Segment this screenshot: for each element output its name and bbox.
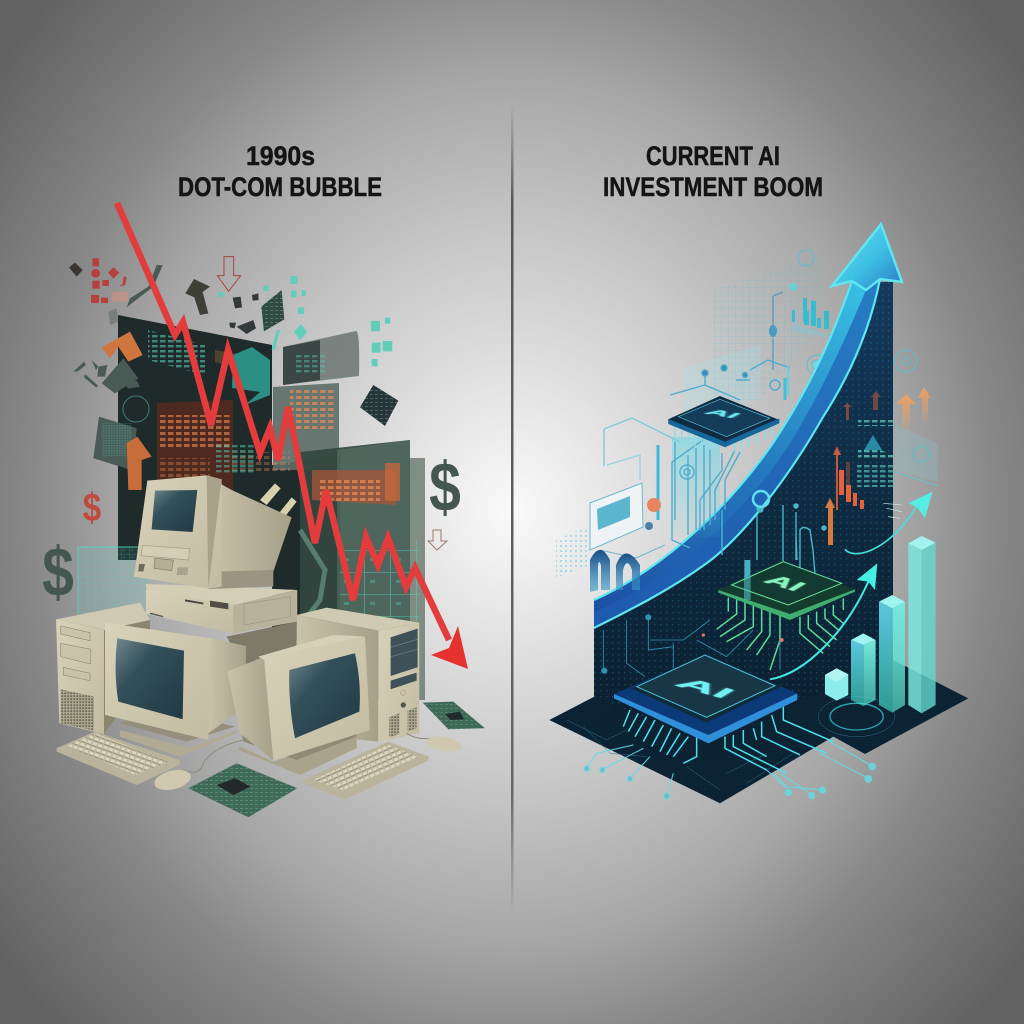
top: [678, 399, 770, 437]
pin extensions beyond floor: [584, 742, 876, 799]
grid panel lower-left: [556, 525, 590, 578]
chip: blue AI chip: [584, 615, 876, 799]
front left monitor: [105, 623, 246, 757]
floor: [549, 660, 968, 803]
pins: [675, 425, 772, 455]
icon: dollar sign green right: $: [429, 449, 461, 526]
orange bars in wall: [825, 391, 881, 545]
icon: small outline down arrow: [428, 530, 447, 550]
node circles: [798, 250, 917, 375]
green top: [732, 562, 842, 605]
icon: dollar sign red: $: [83, 485, 101, 530]
mouse left with cable: [152, 740, 243, 794]
orange up arrows in wall: [833, 446, 841, 510]
top monitor: [134, 475, 297, 589]
shaft: [594, 279, 880, 628]
title: 1990s dot-com bubble: DOT-COM BUBBLE: [178, 172, 382, 202]
panel: teal wireframe: [78, 547, 148, 617]
wireframe grid: [78, 547, 147, 616]
shaft dark inner band: [594, 279, 880, 628]
small dark fragments: [229, 293, 259, 334]
dotted caption of mini chart: [792, 323, 830, 338]
bar 3: [879, 595, 905, 713]
circuit board bottom: [188, 763, 297, 817]
orange shard: [102, 332, 143, 362]
hud panel light overlays upper right: [556, 250, 931, 578]
arrowhead: [431, 626, 468, 669]
chip: green AI chip: [717, 560, 855, 670]
panel: HUD data readout: [857, 418, 938, 487]
title: current AI investment boom: INVESTMENT BOOM: [603, 172, 823, 202]
left tower: [56, 603, 150, 734]
chart line: red crash arrow: [117, 203, 468, 669]
bar 2: [851, 633, 876, 706]
wall dot texture: [594, 282, 893, 740]
debris: flying fragments: [69, 257, 398, 490]
title: current AI investment boom: CURRENT AI: [646, 141, 780, 171]
substrate: [614, 655, 797, 735]
chart: isometric 3D bars: [825, 536, 936, 713]
red squares: [91, 258, 127, 303]
pcb chip right: [360, 385, 398, 426]
illustration: circuitry behind top chip: [604, 360, 790, 548]
arrow: teal rising arrow lower: [770, 563, 877, 679]
shaft edge lines: [594, 279, 880, 628]
green substrate: [718, 561, 855, 618]
bar 4: [908, 536, 936, 713]
teal squares: [218, 276, 392, 366]
middle tower behind: [227, 622, 297, 667]
glow panel behind top chip: [684, 345, 760, 415]
green traces: [717, 597, 843, 670]
icon: dollar sign green large left: $: [42, 534, 74, 611]
blue AI label: AI: [669, 675, 741, 701]
teal chart lines in wall: [722, 491, 826, 590]
circuit board right: [423, 702, 485, 729]
mini bar chart: [792, 298, 829, 329]
circuit lines in wall: [602, 615, 784, 677]
orange down-arrow shard: [127, 437, 152, 490]
panel: dot-com holographic screens: [118, 315, 425, 700]
title: current AI investment boom: [603, 141, 823, 202]
desktop case: [146, 584, 297, 633]
mouse right with cable: [407, 733, 463, 754]
dark fragment: [69, 263, 83, 277]
icon: red outline down arrow: [217, 257, 241, 291]
icon: dark up arrow: [185, 279, 210, 315]
keyboard left: [57, 732, 179, 785]
chip: top dark AI chip: [668, 396, 779, 455]
illustration: stack of retro computers: [56, 475, 485, 817]
connector node stem: [773, 292, 783, 370]
pcb overlay: [102, 423, 132, 457]
green AI label: AI: [758, 572, 812, 594]
panel: dark wall behind curve: [594, 282, 893, 740]
right tower: [297, 608, 419, 742]
pcb shards: [73, 265, 163, 471]
up arrows translucent: [896, 394, 916, 432]
arrow: teal rising arrow upper: [845, 492, 933, 554]
center divider: [511, 105, 514, 915]
title: 1990s dot-com bubble: 1990s: [246, 141, 315, 171]
title: 1990s dot-com bubble: [178, 141, 382, 202]
head: [832, 224, 902, 290]
top chip glyph: AI: [700, 407, 745, 420]
pcb chip fragment: [261, 290, 284, 331]
keyboard right: [303, 742, 429, 799]
chip top: [631, 653, 782, 723]
illustration: circuit base and wall: [549, 660, 968, 803]
illustration: small UI window and logos: [590, 483, 665, 592]
bar 1: [825, 668, 848, 701]
big blue growth arrow: [594, 224, 902, 628]
front right monitor: [227, 635, 370, 775]
substrate: [668, 396, 779, 446]
glyph arches: [590, 550, 610, 592]
blue pins: [623, 707, 833, 773]
floor dot texture: [549, 660, 968, 803]
grid panel top: [713, 255, 820, 400]
floor traces: [567, 697, 895, 790]
